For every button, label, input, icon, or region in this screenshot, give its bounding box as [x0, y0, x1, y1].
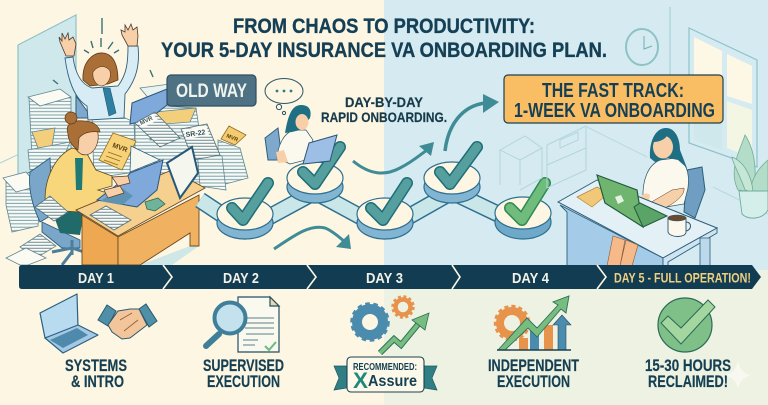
right worker chair	[684, 167, 705, 218]
title	[161, 15, 607, 62]
arrow: middle	[353, 142, 434, 173]
wall line	[669, 7, 671, 100]
label: 15-30 hours reclaimed: RECLAIMED!	[648, 373, 728, 391]
yellow MVR form: MVR	[111, 142, 128, 154]
SR-22 form: SR-22	[185, 129, 206, 139]
back worker body and arms	[65, 46, 138, 120]
front worker hair	[67, 121, 100, 150]
back monitor	[130, 89, 167, 124]
potted plant	[732, 135, 768, 218]
icon: gears and growth arrow	[352, 296, 429, 353]
label: systems & intro: SYSTEMS	[65, 357, 127, 375]
window	[689, 28, 757, 167]
back worker hands	[59, 33, 76, 56]
timeline band: DAY 2	[223, 270, 259, 287]
floor papers	[6, 234, 56, 265]
title: FROM CHAOS TO PRODUCTIVITY:	[233, 15, 535, 38]
front worker shirt	[45, 148, 124, 212]
front worker tie	[75, 158, 83, 190]
illustration: chaotic old-way office	[3, 15, 248, 265]
front worker trousers	[50, 205, 85, 235]
title: YOUR 5-DAY INSURANCE VA ONBOARDING PLAN.	[161, 39, 607, 62]
loose papers on desk	[90, 206, 131, 230]
illustration: small virtual assistant	[265, 78, 337, 164]
day labels: DAY 1	[78, 270, 114, 287]
icon: green check circle	[658, 298, 715, 352]
front worker chair	[29, 158, 80, 248]
timeline band	[19, 265, 761, 289]
label: independent execution	[488, 357, 579, 391]
small laptop	[303, 135, 337, 164]
illustration: calm right office	[500, 7, 768, 270]
label: supervised execution: EXECUTION	[207, 373, 280, 391]
badge: recommended XAssure: RECOMMENDED:	[353, 361, 417, 373]
arrow: lower	[274, 227, 351, 249]
white MVR form: MVR	[139, 115, 155, 127]
node 4	[424, 147, 480, 203]
label: supervised execution: SUPERVISED	[203, 357, 284, 375]
paper stack left tall	[28, 89, 71, 170]
window left	[18, 15, 76, 178]
badge: recommended XAssure: X	[353, 368, 368, 393]
timeline band: DAY 3	[366, 270, 403, 287]
caption: day-by-day rapid onboarding: RAPID ONBOARDING.	[321, 109, 447, 125]
yellow MVR form	[99, 133, 136, 170]
tablet	[167, 147, 198, 198]
paper stack bottom left	[3, 172, 41, 232]
stress marks	[53, 18, 153, 84]
badge: the fast track	[504, 75, 723, 123]
label: systems & intro: & INTRO	[71, 373, 124, 391]
label: systems & intro	[65, 357, 127, 391]
caption: day-by-day rapid onboarding	[321, 94, 447, 125]
white MVR form	[135, 112, 180, 147]
badge: the fast track: 1-WEEK VA ONBOARDING	[514, 99, 715, 122]
back worker tie	[103, 88, 116, 116]
right worker legs	[607, 236, 638, 266]
icon: laptop	[40, 294, 98, 353]
right desk	[558, 180, 717, 258]
coffee mug	[668, 215, 690, 236]
badge: recommended XAssure	[334, 357, 437, 393]
label: supervised execution	[203, 357, 284, 391]
label: independent execution: EXECUTION	[497, 373, 570, 391]
back worker chair	[76, 96, 90, 118]
paper stacks behind desk	[92, 84, 248, 190]
envelope	[577, 187, 609, 207]
front laptop	[97, 160, 163, 207]
badge: the fast track: THE FAST TRACK:	[542, 79, 684, 102]
caption: day-by-day rapid onboarding: DAY-BY-DAY	[345, 94, 424, 110]
node 2	[287, 147, 343, 203]
badge: recommended XAssure: Assure	[368, 373, 417, 390]
process track with checkpoints	[200, 147, 551, 239]
connector bands	[200, 192, 523, 230]
timeline band: DAY 4	[512, 270, 550, 287]
wall clock	[626, 29, 658, 65]
SR-22 form	[181, 124, 220, 160]
thought bubble	[265, 78, 303, 115]
node 3	[357, 183, 413, 239]
icon: gear chart and arrow	[496, 296, 571, 350]
arrow: upper	[445, 94, 499, 151]
right worker body	[643, 158, 688, 208]
node 5	[495, 183, 551, 239]
green laptop	[597, 175, 667, 227]
small yellow MVR form	[221, 126, 246, 145]
back worker hair and face	[83, 53, 118, 86]
icon: handshake	[98, 304, 157, 339]
sparkle	[725, 361, 751, 389]
label: independent execution: INDEPENDENT	[488, 357, 579, 375]
badge: old way: OLD WAY	[176, 81, 247, 102]
icon: magnifier and document	[206, 297, 279, 352]
label: 15-30 hours reclaimed: 15-30 HOURS	[645, 357, 731, 375]
desk	[76, 170, 205, 236]
badge: old way	[167, 75, 256, 106]
right worker head and hair	[650, 128, 687, 168]
front worker head	[73, 123, 98, 155]
label: 15-30 hours reclaimed	[645, 357, 731, 391]
filing cabinets	[500, 126, 586, 190]
node 1	[217, 183, 273, 239]
front worker hands	[104, 176, 130, 198]
green stapler	[145, 198, 165, 211]
small yellow MVR form: MVR	[225, 133, 239, 143]
